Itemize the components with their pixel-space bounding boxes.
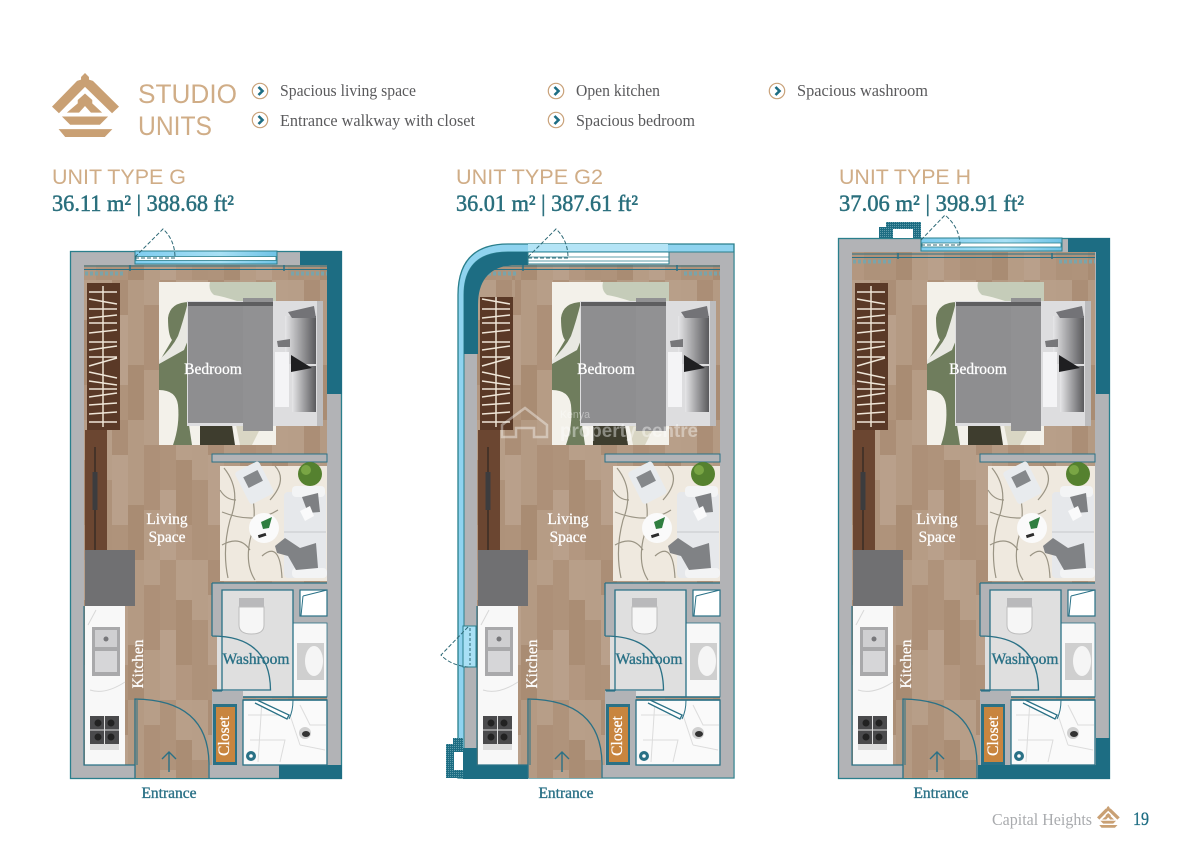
watermark: kenya property centre: Kenya (560, 409, 591, 421)
label: living space: Space (918, 529, 956, 546)
curtain track (84, 265, 327, 274)
interior fit-out (852, 252, 1095, 778)
sliding closet door (853, 430, 875, 550)
footer: brand and page number (992, 806, 1149, 830)
label: living space: Living (146, 511, 188, 528)
floor plan: unit G (70, 229, 342, 802)
shower (243, 700, 327, 765)
label: living space: Living (547, 511, 589, 528)
label: washroom: Washroom (223, 651, 289, 668)
heading: unit type H (839, 166, 1024, 216)
brand name: Capital Heights (992, 810, 1092, 829)
shower (636, 700, 720, 765)
extended wood floor (852, 252, 1095, 266)
window and balcony door (921, 215, 1062, 251)
wardrobe (855, 283, 888, 430)
heading: unit type G: UNIT TYPE G (52, 166, 186, 189)
wardrobe (87, 283, 120, 430)
closet (212, 691, 243, 765)
walls (70, 251, 342, 779)
title: studio units: STUDIO (138, 79, 237, 109)
entrance door and arrow (903, 699, 977, 778)
bedroom rug and bed (159, 282, 323, 445)
heading: unit type H: 37.06 m² | 398.91 ft² (839, 191, 1024, 216)
logo: studio units emblem (52, 73, 119, 137)
footer logo (1097, 806, 1120, 828)
floor patch above wardrobe (478, 276, 515, 297)
kitchen counter with sink and stove (852, 550, 903, 765)
page number: 19 (1133, 809, 1149, 830)
feature: spacious washroom: Spacious washroom (797, 81, 928, 100)
wood floor (84, 265, 327, 778)
living area rug and sofa (212, 454, 327, 581)
living area rug and sofa (980, 454, 1095, 581)
label: closet: Closet (216, 716, 233, 756)
title: studio units (138, 79, 237, 141)
curved teal corner wall (464, 252, 528, 354)
entrance door and arrow (135, 699, 209, 778)
label: washroom: Washroom (616, 651, 682, 668)
heading: unit type G (52, 166, 234, 216)
bedroom rug and bed (927, 282, 1091, 445)
label: entrance: Entrance (913, 785, 969, 802)
wood floor (852, 265, 1095, 778)
label: entrance: Entrance (141, 785, 197, 802)
heading: unit type G2: UNIT TYPE G2 (456, 166, 603, 189)
closet (605, 691, 636, 765)
washroom (212, 583, 327, 697)
curtain track (477, 265, 720, 274)
window and balcony door (528, 229, 669, 264)
bedroom rug and bed (552, 282, 716, 445)
feature: entrance walkway with closet: Entrance walkway with closet (280, 111, 475, 130)
heading: unit type G2: 36.01 m² | 387.61 ft² (456, 191, 638, 216)
living area rug and sofa (605, 454, 720, 581)
sliding closet door (85, 430, 107, 550)
feature list (252, 81, 928, 130)
label: washroom: Washroom (992, 651, 1058, 668)
kitchen counter with sink and stove (477, 550, 528, 765)
shower (1011, 700, 1095, 765)
label: kitchen: Kitchen (898, 639, 915, 689)
label: bedroom: Bedroom (577, 361, 635, 378)
label: living space: Living (916, 511, 958, 528)
label: kitchen: Kitchen (130, 639, 147, 689)
wardrobe (480, 283, 513, 430)
wood floor (477, 265, 720, 778)
walls with curved glazing (446, 244, 734, 779)
floor plan: unit G2 (441, 229, 734, 802)
watermark: kenya property centre (502, 408, 698, 442)
heading: unit type G2 (456, 166, 638, 216)
heading: unit type G: 36.11 m² | 388.68 ft² (52, 191, 234, 216)
label: bedroom: Bedroom (184, 361, 242, 378)
label: entrance: Entrance (538, 785, 594, 802)
washroom (605, 583, 720, 697)
heading: unit type H: UNIT TYPE H (839, 166, 971, 189)
feature: spacious bedroom: Spacious bedroom (576, 111, 695, 130)
label: living space: Space (549, 529, 587, 546)
closet (980, 691, 1011, 765)
label: bedroom: Bedroom (949, 361, 1007, 378)
sliding closet door (478, 430, 500, 550)
floor plan: unit H (838, 215, 1110, 802)
walls (838, 222, 1110, 779)
feature: spacious living space: Spacious living space (280, 81, 416, 100)
window and balcony door (135, 229, 277, 264)
curtain track (852, 253, 1095, 262)
interior fit-out (477, 265, 720, 778)
kitchen counter with sink and stove (84, 550, 135, 765)
feature: open kitchen: Open kitchen (576, 81, 660, 100)
label: kitchen: Kitchen (524, 639, 541, 689)
side window door (441, 626, 476, 667)
title: studio units: UNITS (138, 111, 212, 141)
label: living space: Space (148, 529, 186, 546)
watermark: kenya property centre: property centre (560, 421, 698, 442)
label: closet: Closet (609, 716, 626, 756)
entrance door and arrow (528, 699, 602, 778)
washroom (980, 583, 1095, 697)
label: closet: Closet (985, 716, 1002, 756)
